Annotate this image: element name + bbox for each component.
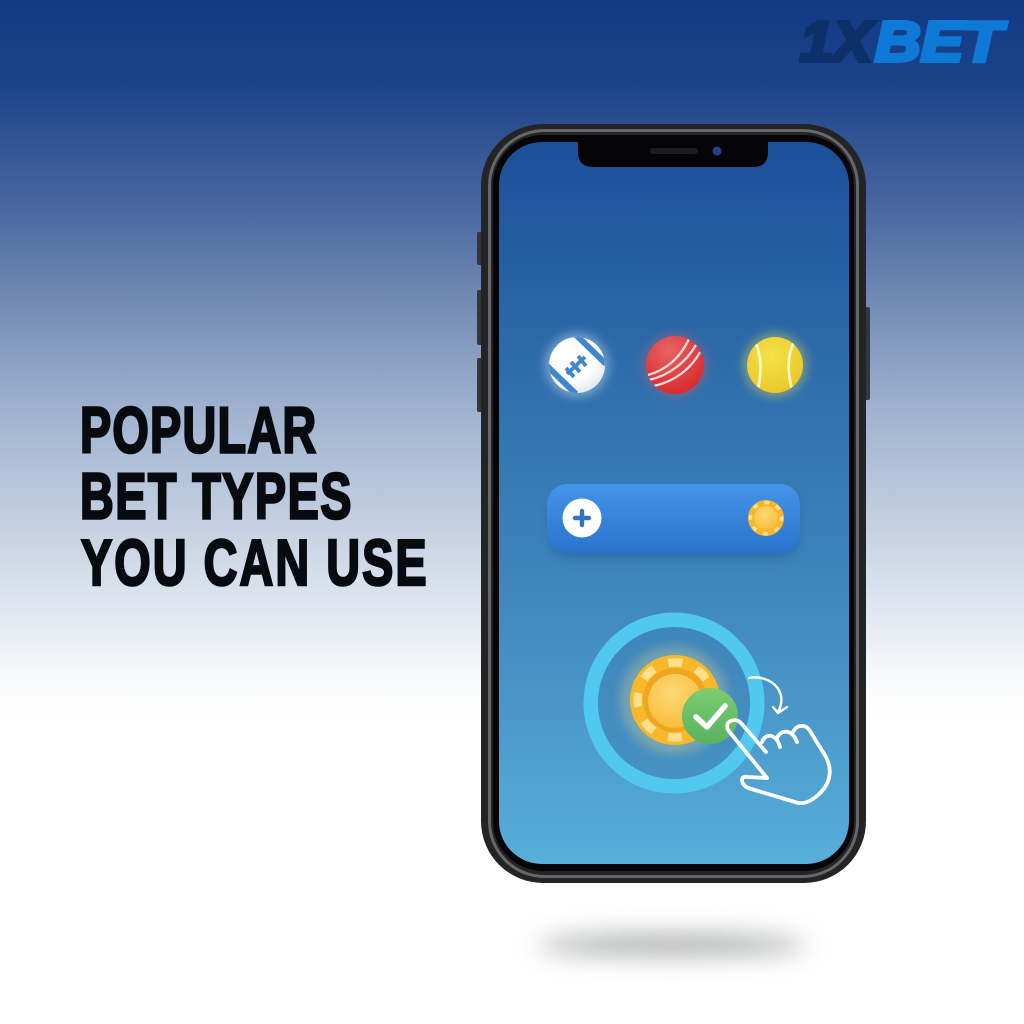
- icon: cricket ball: [643, 333, 707, 397]
- icon: american football: [545, 333, 609, 397]
- title: BET TYPES: [80, 461, 351, 534]
- title: [80, 395, 427, 600]
- icon: tennis ball: [743, 333, 807, 397]
- logo: 1XBET: [800, 10, 1007, 74]
- icon: gold chip: [620, 646, 728, 754]
- title: YOU CAN USE: [81, 528, 427, 600]
- logo: 1XBET: 1X: [800, 10, 875, 74]
- icon: small chip: [748, 500, 784, 536]
- phone frame: [481, 124, 866, 883]
- icon: plus button: [562, 498, 602, 538]
- bet slip bar: [547, 484, 800, 558]
- ring: [597, 626, 751, 780]
- notch: [578, 140, 768, 167]
- icon: green check: [682, 688, 738, 744]
- phone: [477, 124, 870, 883]
- confirm bet control: [591, 620, 830, 803]
- icon: pointing hand: [727, 720, 830, 803]
- logo: 1XBET: BET: [875, 10, 1007, 74]
- side buttons: [477, 232, 870, 412]
- screen: [499, 142, 849, 864]
- phone shadow: [537, 933, 807, 957]
- icon: curved arrow: [749, 677, 787, 713]
- title: POPULAR: [80, 395, 316, 468]
